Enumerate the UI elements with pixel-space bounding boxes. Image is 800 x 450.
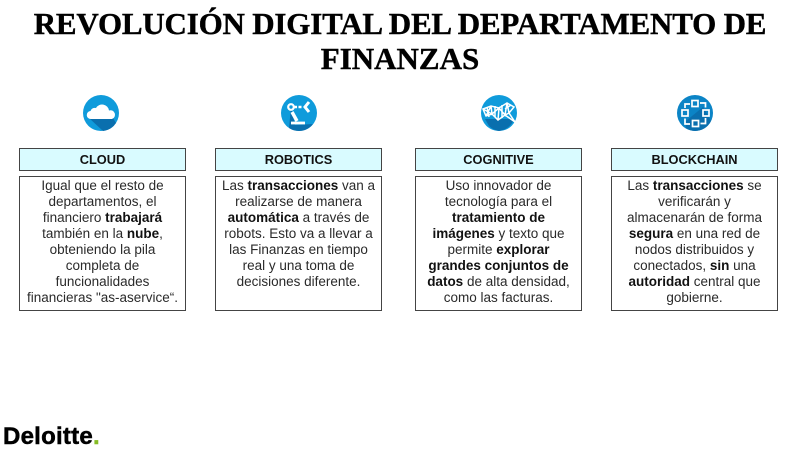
- title: REVOLUCIÓN DIGITAL DEL DEPARTAMENTO DE: [34, 6, 766, 41]
- panel: cognitive text: tratamiento de: [452, 210, 545, 225]
- panel: cloud header: CLOUD: [80, 152, 125, 167]
- panel: cloud text: [19, 176, 186, 311]
- panel: blockchain text: nodos distribuidos y: [635, 242, 754, 257]
- panel: cloud text: Igual que el resto de: [41, 178, 164, 193]
- panel: blockchain header: BLOCKCHAIN: [651, 152, 738, 167]
- panel: robotics text: Las transacciones van a: [222, 178, 375, 193]
- panel: robotics text: decisiones diferente.: [237, 274, 360, 289]
- title: FINANZAS: [321, 41, 479, 76]
- panel: cognitive text: tecnología para el: [445, 194, 552, 209]
- panel: robotics text: real y una toma de: [243, 258, 354, 273]
- panel: blockchain text: almacenarán de forma: [627, 210, 762, 225]
- panel: blockchain text: autoridad central que: [628, 274, 761, 289]
- panel: cloud text: funcionalidades: [56, 274, 149, 289]
- panel: cloud text: obteniendo la pila: [50, 242, 155, 257]
- panel: blockchain text: gobierne.: [666, 290, 723, 305]
- panel: cognitive text: Uso innovador de: [446, 178, 551, 193]
- panel: blockchain text: verificarán y: [658, 194, 731, 209]
- title: [34, 6, 766, 76]
- logo: Deloitte: Deloitte.: [3, 423, 100, 450]
- panel: cloud text: completa de: [66, 258, 139, 273]
- panel: robotics text: [215, 176, 382, 311]
- icon: cloud: [83, 95, 119, 131]
- panel: cognitive text: grandes conjuntos de: [428, 258, 569, 273]
- panel: cognitive text: imágenes y texto que: [432, 226, 565, 241]
- panel: cognitive header: [415, 148, 582, 171]
- panel: blockchain text: segura en una red de: [629, 226, 760, 241]
- panel: blockchain text: [611, 176, 778, 311]
- panel: robotics header: ROBOTICS: [265, 152, 332, 167]
- panel: robotics text: robots. Esto va a llevar a: [224, 226, 373, 241]
- panel: robotics header: [215, 148, 382, 171]
- panel: cognitive text: permite explorar: [447, 242, 550, 257]
- panel: cognitive text: como las facturas.: [444, 290, 553, 305]
- panel: cognitive text: datos de alta densidad,: [427, 274, 570, 289]
- icon: cognitive network: [481, 95, 517, 131]
- panel: cognitive header: COGNITIVE: [463, 152, 534, 167]
- icon: blockchain: [677, 95, 713, 131]
- panel: robotics text: realizarse de manera: [235, 194, 362, 209]
- panel: cloud text: también en la nube,: [42, 226, 163, 241]
- panel: cloud text: financieras "as-aservice“.: [27, 290, 178, 305]
- panel: cognitive text: [415, 176, 582, 311]
- panel: blockchain text: conectados, sin una: [633, 258, 756, 273]
- panel: robotics text: las Finanzas en tiempo: [229, 242, 368, 257]
- panel: cloud header: [19, 148, 186, 171]
- icon: robot arm: [281, 95, 317, 131]
- panel: robotics text: automática a través de: [228, 210, 369, 225]
- panel: cloud text: departamentos, el: [48, 194, 157, 209]
- panel: cloud text: financiero trabajará: [43, 210, 162, 225]
- panel: blockchain text: Las transacciones se: [627, 178, 762, 193]
- panel: blockchain header: [611, 148, 778, 171]
